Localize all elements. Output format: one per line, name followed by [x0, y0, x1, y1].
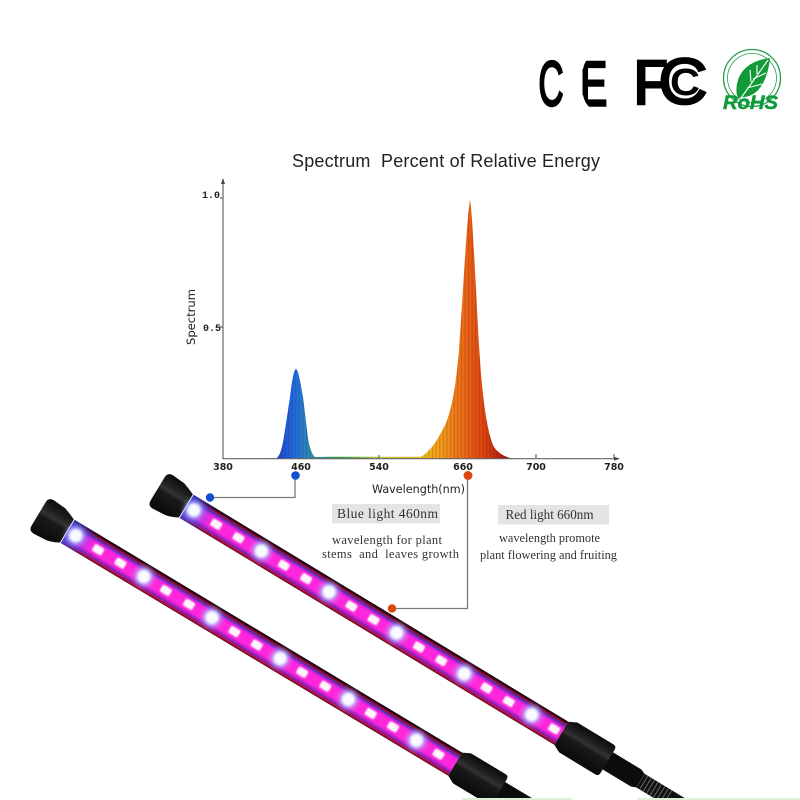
lamp bar: back right — [148, 472, 710, 800]
logo: CE mark — [538, 48, 607, 120]
logo: FCC mark: F — [633, 45, 669, 119]
x axis tick labels: 380 — [213, 462, 233, 473]
x axis tick labels: 780 — [604, 462, 624, 473]
description: red light: wavelength promote — [499, 530, 600, 545]
description: red light — [480, 530, 617, 562]
spectrum chart — [184, 178, 624, 496]
spectrum tail — [255, 457, 430, 459]
chart title: Spectrum Percent of Relative Energy — [292, 151, 600, 171]
y axis title: Spectrum — [184, 289, 198, 345]
description: red light: plant flowering and fruiting — [480, 547, 617, 562]
logo: FCC mark: C — [658, 44, 708, 118]
heading: red light: Red light 660nm — [506, 507, 594, 522]
x axis tick labels: 540 — [369, 462, 389, 473]
text block: blue light — [322, 504, 460, 561]
lamp tube — [180, 495, 568, 745]
collar and neck — [446, 749, 544, 800]
text block: red light — [480, 505, 617, 562]
heading: blue light: Blue light 460nm — [337, 506, 438, 521]
logo: CE mark: C — [538, 48, 564, 119]
callout: blue light connector — [206, 471, 300, 502]
x axis tick labels — [213, 462, 624, 473]
logo: RoHS leaf: RoHS — [723, 93, 778, 114]
logo: FCC mark — [633, 44, 708, 119]
x axis tick labels: 460 — [291, 462, 311, 473]
LED row — [63, 523, 448, 764]
logo: RoHS leaf — [723, 50, 780, 114]
certification logos — [538, 44, 780, 120]
logo: CE mark: E — [580, 50, 607, 120]
lamp tube — [61, 520, 462, 776]
x axis tick labels: 700 — [526, 462, 546, 473]
logo: FCC mark: C — [670, 62, 700, 104]
lamp bar: front left — [29, 497, 545, 800]
end cap — [29, 497, 77, 548]
callout: red light connector — [388, 471, 472, 613]
end cap — [148, 472, 196, 523]
y axis labels — [202, 191, 221, 335]
LED row — [181, 498, 564, 739]
y axis labels: 0.5 — [203, 324, 221, 335]
x axis title: Wavelength(nm) — [372, 482, 465, 496]
x axis tick labels: 660 — [453, 462, 473, 473]
description: blue light: stems and leaves growth — [322, 547, 460, 561]
bottom edge green strips — [462, 798, 800, 800]
red peak — [416, 200, 512, 458]
chart axes — [220, 178, 620, 461]
blue peak — [276, 369, 317, 458]
y axis labels: 1.0 — [202, 191, 220, 202]
description: blue light: wavelength for plant — [332, 533, 443, 547]
collar, neck and gooseneck — [552, 718, 709, 800]
description: blue light — [322, 533, 460, 561]
